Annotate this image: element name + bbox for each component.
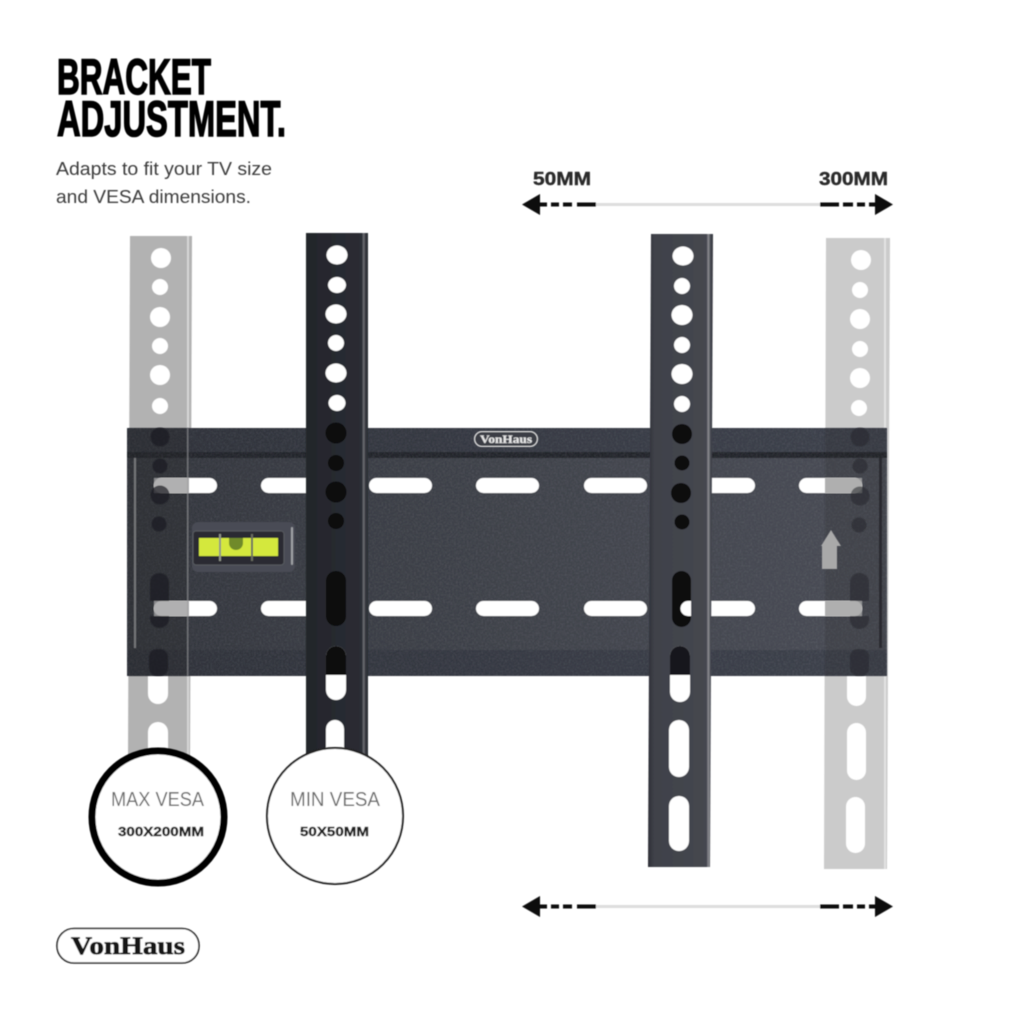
label: 50mm: 50MM: [533, 169, 591, 189]
wall plate: [127, 428, 887, 676]
badge: min vesa: MIN VESA: [290, 789, 381, 811]
arrow: top width range: [522, 194, 893, 215]
badge: max vesa: 300X200MM: [118, 824, 204, 839]
plate logo: [474, 432, 538, 446]
title: ADJUSTMENT.: [57, 91, 286, 147]
title: BRACKET: [57, 49, 211, 105]
badge: min vesa: 50X50MM: [300, 824, 369, 839]
ghost arm overlay on plate: right: [825, 428, 886, 676]
arrow: bottom width range: [522, 896, 893, 917]
badge: max vesa: [92, 751, 224, 883]
icon: up arrow on plate: [821, 530, 841, 569]
description text: [56, 159, 272, 207]
title: [57, 49, 286, 147]
label: 300mm: 300MM: [819, 169, 888, 189]
ghost bracket arm: right, max position (behind plate): [824, 238, 890, 869]
plate slots: bottom row: [154, 601, 862, 616]
ghost arm overlay on plate: left: [129, 428, 189, 676]
bracket arm: left, min position: [306, 233, 368, 770]
plate logo: VonHaus: [480, 434, 533, 446]
badge: min vesa: [267, 748, 403, 884]
ghost bracket arm: left, max position (behind plate): [128, 236, 192, 778]
description text: and VESA dimensions.: [56, 187, 251, 207]
brand logo: VonHaus: [71, 933, 185, 960]
spirit level: [192, 522, 295, 572]
brand logo: [57, 928, 199, 963]
badge: max vesa: MAX VESA: [111, 789, 205, 811]
description text: Adapts to fit your TV size: [56, 159, 272, 179]
plate slots: top row: [154, 478, 862, 493]
bracket arm: right, min position: [648, 234, 713, 867]
